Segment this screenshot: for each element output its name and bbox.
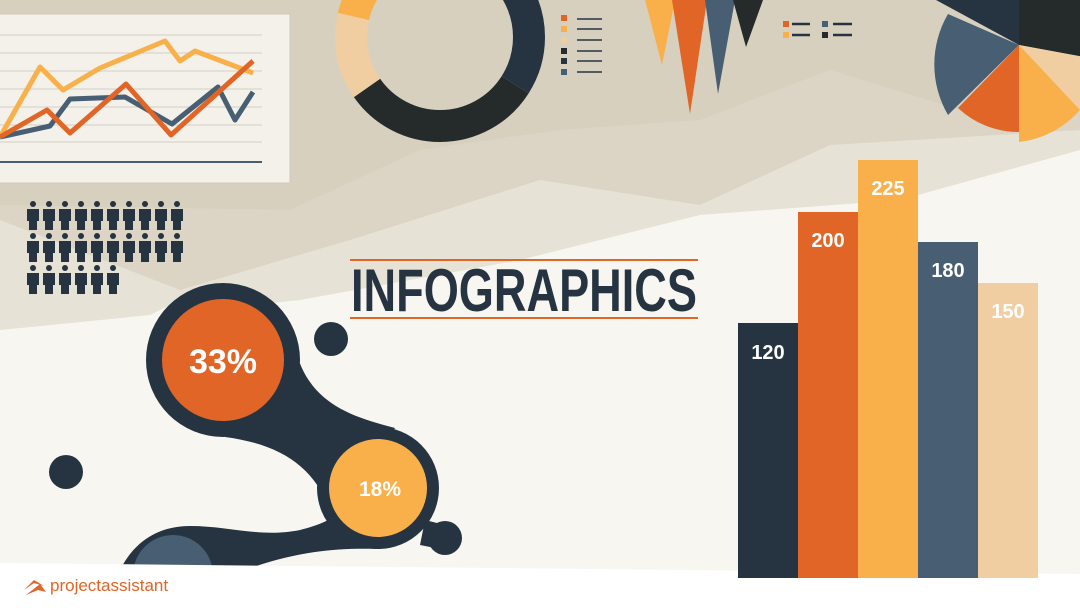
bar chart: 225 — [871, 178, 905, 200]
pie chart — [934, 0, 1080, 142]
people icons — [27, 201, 183, 294]
footer — [0, 563, 1080, 608]
bar chart — [738, 160, 1038, 578]
bubble diagram: 18% — [359, 478, 401, 501]
bubble diagram — [120, 283, 462, 608]
dot — [314, 322, 348, 356]
donut chart — [351, 0, 529, 126]
footer: projectassistant — [50, 576, 168, 595]
bubble diagram: 33% — [189, 343, 257, 381]
spike chart — [645, 0, 763, 114]
line chart panel — [0, 14, 290, 183]
dot — [49, 455, 83, 489]
legend 2 — [783, 21, 852, 38]
title: INFOGRAPHICS — [351, 257, 697, 324]
bar chart: 200 — [811, 230, 845, 252]
bar chart: 180 — [931, 260, 965, 282]
bar chart: 120 — [751, 342, 785, 364]
bar chart: 150 — [991, 301, 1025, 323]
legend 1 — [561, 15, 602, 75]
